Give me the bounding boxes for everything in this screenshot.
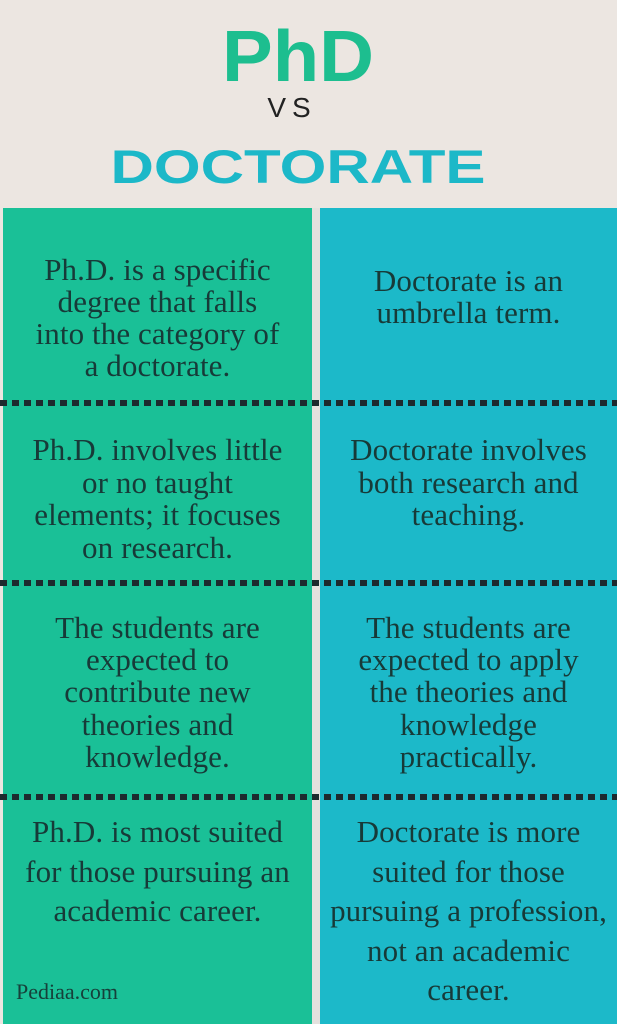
title: DOCTORATE [110, 140, 486, 193]
text: phd row 2: Ph.D. involves little [32, 432, 283, 467]
text: doctorate row 2: Doctorate involves [350, 432, 587, 467]
text: phd row 2: on research. [82, 530, 233, 564]
text: phd row 3 [55, 610, 260, 774]
logo: Pediaa.com: Pediaa.com [16, 979, 118, 1004]
text: doctorate row 4: not an academic [367, 932, 570, 968]
text: phd row 4: for those pursuing an [25, 854, 290, 888]
text: doctorate row 3: practically. [400, 739, 537, 774]
text: doctorate row 3 [358, 610, 579, 774]
text: doctorate row 3: knowledge [400, 707, 537, 742]
text: phd row 1 [36, 252, 280, 383]
text: doctorate row 4: pursuing a profession, [330, 893, 607, 928]
text: doctorate row 4: Doctorate is more [357, 814, 580, 849]
text: doctorate row 3: The students are [366, 610, 571, 645]
text: phd row 1: into the category of [36, 316, 279, 351]
text: doctorate row 3: expected to apply [358, 642, 579, 677]
text: doctorate row 3: the theories and [370, 674, 567, 709]
text: doctorate row 4: career. [427, 972, 510, 1007]
text: phd row 4: Ph.D. is most suited [32, 814, 283, 849]
title [110, 17, 486, 193]
panel: PhD column [3, 208, 312, 1024]
text: phd row 3: expected to [86, 642, 229, 677]
text: doctorate row 2: teaching. [412, 497, 525, 532]
text: phd row 3: knowledge. [85, 739, 230, 774]
text: phd row 1: Ph.D. is a specific [44, 252, 271, 287]
text: phd row 4 [25, 814, 290, 928]
title: PhD [222, 17, 374, 97]
text: phd row 4: academic career. [53, 893, 262, 928]
text: phd row 1: degree that falls [58, 284, 257, 319]
text: phd row 2: or no taught [82, 464, 233, 500]
panel: Doctorate column [320, 208, 617, 1024]
text: doctorate row 4 [330, 814, 607, 1007]
text: phd row 3: theories and [82, 707, 233, 742]
text: doctorate row 2 [350, 432, 587, 532]
text: phd row 2: elements; it focuses [34, 497, 281, 532]
text: doctorate row 4: suited for those [372, 854, 565, 888]
text: doctorate row 1 [374, 263, 563, 330]
text: doctorate row 1: umbrella term. [377, 295, 560, 330]
title: VS [267, 92, 317, 123]
text: doctorate row 1: Doctorate is an [374, 263, 563, 298]
text: doctorate row 2: both research and [358, 464, 579, 500]
text: phd row 3: contribute new [64, 674, 251, 709]
text: phd row 1: a doctorate. [85, 348, 230, 383]
text: phd row 3: The students are [55, 610, 260, 645]
text: phd row 2 [32, 432, 283, 564]
